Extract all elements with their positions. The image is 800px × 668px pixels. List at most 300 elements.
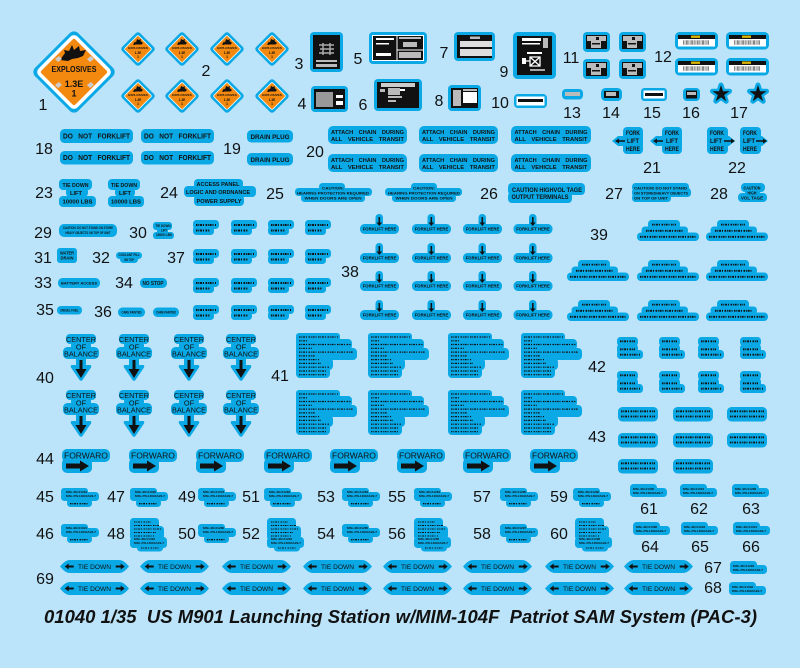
decal 40: center of balance: OF xyxy=(76,342,87,352)
decal 17: stars: 17 xyxy=(730,105,748,122)
decals 45 to 60: serial number blocks: MSL-PN-13094A29-7 xyxy=(578,494,608,498)
decal 23: tie down lift 10000 lbs: 10000 LBS xyxy=(111,200,141,206)
decal 20: attach chain during all vehicle transit xyxy=(306,126,591,172)
decal 14: small plate: 14 xyxy=(602,105,620,122)
decal 2: small explosives placards: 1 xyxy=(271,55,273,59)
decals 61 to 68: two-line serial blocks: MSL-9N-01018 xyxy=(684,525,705,529)
decals 45 to 60: serial number blocks: MSL-9N-01022 xyxy=(134,537,155,541)
decal 40: center of balance: BALANCE xyxy=(117,406,151,414)
decals 45 to 60: serial number blocks: MSL-PN-13094A29-7 xyxy=(203,494,233,498)
decal 35: diesel fuel: 35 xyxy=(36,302,54,319)
decal 40: center of balance: CENTER xyxy=(119,391,149,400)
decal 31: water drain: 31 xyxy=(34,250,52,267)
decal 12: barcode plates xyxy=(654,32,769,76)
decal 30: small tie down xyxy=(129,222,174,242)
decals 45 to 60: serial number blocks: 51 xyxy=(242,489,260,506)
decal 5: data plate: 5 xyxy=(354,51,363,68)
decal 41: dense text blocks: 41 xyxy=(271,368,289,385)
decal 40: center of balance: OF xyxy=(129,342,140,352)
decal 32: coolant fill xyxy=(92,250,142,267)
decal 40: center of balance xyxy=(36,334,259,437)
decal 43: two-line text blocks: 43 xyxy=(588,429,606,446)
decal 40: center of balance: CENTER xyxy=(66,335,96,344)
decal 29: caution small text: HEAVY OBJECTS ON TOP OF UNIT xyxy=(66,231,111,235)
decal 18: do not forklift: DO NOT FORKLIFT xyxy=(63,153,130,162)
decals 45 to 60: serial number blocks: 58 xyxy=(473,526,491,543)
decal 12: barcode plates: 12 xyxy=(654,49,672,66)
decals 45 to 60: serial number blocks: 59 xyxy=(550,489,568,506)
decal 19: drain plug xyxy=(223,130,293,166)
decal 44: forward arrows: 44 xyxy=(36,451,54,468)
decals 45 to 60: serial number blocks: MSL-PN-13094A29-7 xyxy=(66,530,96,534)
decal 30: small tie down: 10000 LBS xyxy=(156,233,172,237)
decals 61 to 68: two-line serial blocks: MSL-9N-01031 xyxy=(683,487,704,491)
decal 69: tie down arrows: TIE DOWN xyxy=(240,564,273,571)
decal 26: caution high voltage output terminals xyxy=(480,183,585,203)
decals 45 to 60: serial number blocks: 57 xyxy=(473,489,491,506)
decals 61 to 68: two-line serial blocks: 61 xyxy=(640,501,658,518)
decal 40: center of balance: BALANCE xyxy=(64,350,98,358)
decal 36: care painted: CARE PAINTED xyxy=(122,310,142,314)
decal 40: center of balance: OF xyxy=(184,342,195,352)
decal 32: coolant fill: COOLANT FILL xyxy=(118,253,140,257)
decal 69: tie down arrows: TIE DOWN xyxy=(78,586,111,593)
decal 43: two-line text blocks xyxy=(588,407,767,474)
decals 45 to 60: serial number blocks: MSL-PN-13094A29-7 xyxy=(271,541,301,545)
decal 8: data plate: 8 xyxy=(435,93,444,110)
decal 20: attach chain during all vehicle transit: ALL VEHICLE TRANSIT xyxy=(331,165,404,171)
decal 69: tie down arrows: TIE DOWN xyxy=(642,564,675,571)
decals 45 to 60: serial number blocks: 45 xyxy=(36,489,54,506)
decal 25: caution hearing protection required: HEARING PROTECTION REQUIRED xyxy=(297,190,369,195)
decal 22: fork lift here, right arrows: FORK xyxy=(710,131,725,137)
decals 45 to 60: serial number blocks: MSL-9N-01285 xyxy=(347,526,368,530)
decal 28: caution high voltage xyxy=(710,183,767,203)
decal 42: small stacked text blocks xyxy=(588,337,766,393)
decal 21: fork lift here, left arrows xyxy=(612,127,682,177)
decals 45 to 60: serial number blocks: MSL-9N-01280 xyxy=(203,526,224,530)
decals 61 to 68: two-line serial blocks: 65 xyxy=(691,539,709,556)
decal 2: small explosives placards: EXPLOSIVES xyxy=(217,93,237,97)
decals 61 to 68: two-line serial blocks: 64 xyxy=(641,539,659,556)
decals 45 to 60: serial number blocks: MSL-PN-13094A29-7 xyxy=(135,494,165,498)
decals 45 to 60: serial number blocks: MSL-9N-01021 xyxy=(66,526,87,530)
decal 2: small explosives placards: 1 xyxy=(226,55,228,59)
decal 14: small plate xyxy=(601,88,622,122)
decal 11: plates xyxy=(563,32,646,79)
decal 42: small stacked text blocks: 42 xyxy=(588,359,606,376)
decal 40: center of balance: BALANCE xyxy=(172,406,206,414)
decal 25: caution hearing protection required xyxy=(266,183,462,203)
decal 38: forklift here arrows: FORKLIFT HERE xyxy=(415,256,448,261)
decal 20: attach chain during all vehicle transit: ALL VEHICLE TRANSIT xyxy=(331,137,404,143)
decal 28: caution high voltage: 28 xyxy=(710,186,728,203)
decal 21: fork lift here, left arrows: HERE xyxy=(665,147,679,153)
decal 22: fork lift here, right arrows: LIFT xyxy=(743,139,755,145)
decal 16: small plate xyxy=(682,88,700,122)
decal 2: small explosives placards: 1.3E xyxy=(135,51,141,55)
decal 38: forklift here arrows: FORKLIFT HERE xyxy=(363,284,396,289)
decal 27: caution do not stand: CAUTION! DO NOT STAND xyxy=(634,185,687,190)
decal 44: forward arrows xyxy=(36,449,578,473)
decal 22: fork lift here, right arrows: FORK xyxy=(743,131,758,137)
decal 36: care painted xyxy=(94,304,179,321)
decal 2: small explosives placards: 1.3E xyxy=(269,51,275,55)
decal 40: center of balance: CENTER xyxy=(226,335,256,344)
decals 45 to 60: serial number blocks: MSL-9N-01283 xyxy=(347,490,368,494)
decal 40: center of balance: BALANCE xyxy=(117,350,151,358)
decal 31: water drain: DRAIN xyxy=(60,256,74,261)
decal 2: small explosives placards: 1 xyxy=(137,55,139,59)
decal 3: data plate: 3 xyxy=(295,56,304,73)
decal 38: forklift here arrows: 38 xyxy=(341,264,359,281)
decal 2: small explosives placards: 1.3E xyxy=(135,98,141,102)
decal 20: attach chain during all vehicle transit: ALL VEHICLE TRANSIT xyxy=(422,165,495,171)
decal 69: tie down arrows: TIE DOWN xyxy=(158,586,191,593)
decal 18: do not forklift xyxy=(35,129,214,164)
decal 38: forklift here arrows: FORKLIFT HERE xyxy=(415,227,448,232)
decals 45 to 60: serial number blocks: MSL-9N-01073 xyxy=(203,490,224,494)
decals 45 to 60: serial number blocks: MSL-PN-13094A29-7 xyxy=(134,541,164,545)
decal 36: care painted: CARE PAINTED xyxy=(156,310,177,314)
decals 45 to 60: serial number blocks: 46 xyxy=(36,526,54,543)
decal 30: small tie down: 30 xyxy=(129,225,147,242)
decal 2: small explosives placards: EXPLOSIVES xyxy=(128,93,148,97)
decals 45 to 60: serial number blocks: MSL-9N-01284 xyxy=(419,490,440,494)
decal 69: tie down arrows: TIE DOWN xyxy=(321,586,354,593)
decals 45 to 60: serial number blocks xyxy=(36,488,612,552)
decals 45 to 60: serial number blocks: 60 xyxy=(550,526,568,543)
decal 27: caution do not stand: ON TOP OF UNIT xyxy=(634,195,669,200)
decal 21: fork lift here, left arrows: LIFT xyxy=(666,139,678,145)
decal 23: tie down lift 10000 lbs: 10000 LBS xyxy=(62,200,93,206)
decal 28: caution high voltage: HIGH xyxy=(748,190,756,196)
decal 13: small plate: 13 xyxy=(563,105,581,122)
decal 69: tie down arrows: TIE DOWN xyxy=(642,586,675,593)
decal 40: center of balance: OF xyxy=(184,398,195,408)
decal 20: attach chain during all vehicle transit: ATTACH CHAIN DURING xyxy=(331,130,404,136)
decal 17: stars xyxy=(712,85,766,122)
decal 2: small explosives placards: 1.3E xyxy=(269,98,275,102)
decals 45 to 60: serial number blocks: 49 xyxy=(178,489,196,506)
decal 25: caution hearing protection required: WHEN DOORS ARE OPEN xyxy=(304,195,362,200)
decals 61 to 68: two-line serial blocks xyxy=(630,484,770,597)
decal 9: data plate xyxy=(500,32,556,81)
decal 23: tie down lift 10000 lbs xyxy=(35,179,144,207)
decal 69: tie down arrows: TIE DOWN xyxy=(321,564,354,571)
decals 45 to 60: serial number blocks: MSL-9N-01286 xyxy=(418,537,439,541)
decal 1: large explosives placard xyxy=(31,29,117,115)
decal 2: small explosives placards: 1.3E xyxy=(224,98,230,102)
decals 45 to 60: serial number blocks: 48 xyxy=(107,526,125,543)
decal 69: tie down arrows: TIE DOWN xyxy=(563,564,596,571)
decal 30: small tie down: LIFT xyxy=(161,228,167,232)
decal 21: fork lift here, left arrows: LIFT xyxy=(627,139,639,145)
decal 2: small explosives placards: EXPLOSIVES xyxy=(262,46,282,50)
decal 24: access panel logic and ordnance power supply: POWER SUPPLY xyxy=(196,199,242,205)
decal 38: forklift here arrows xyxy=(341,214,552,320)
decal 25: caution hearing protection required: CAUTION: xyxy=(413,185,435,190)
decal 2: small explosives placards: EXPLOSIVES xyxy=(262,93,282,97)
decal 25: caution hearing protection required: WHEN DOORS ARE OPEN xyxy=(396,195,453,200)
decal 6: data plate xyxy=(359,79,422,114)
decal 31: water drain xyxy=(34,248,77,267)
decal 15: small plate xyxy=(641,88,667,122)
decals 45 to 60: serial number blocks: MSL-PN-13094A29-7 xyxy=(419,494,449,498)
decal 29: caution small text xyxy=(34,224,117,242)
decal 9: data plate: 9 xyxy=(500,64,509,81)
decal 8: data plate xyxy=(435,85,481,111)
decals 45 to 60: serial number blocks: MSL-PN-13094A29-7 xyxy=(505,530,535,534)
decal 21: fork lift here, left arrows: FORK xyxy=(626,131,641,137)
decals 61 to 68: two-line serial blocks: MSL-9N-01032 xyxy=(732,585,753,589)
decal 35: diesel fuel xyxy=(36,302,82,319)
decals 45 to 60: serial number blocks: MSL-PN-13094A29-7 xyxy=(347,530,377,534)
decal 32: coolant fill: ON TOP xyxy=(124,258,135,262)
decal 38: forklift here arrows: FORKLIFT HERE xyxy=(466,313,499,318)
decal 44: forward arrows: FORWARO xyxy=(131,450,175,460)
decal 44: forward arrows: FORWARO xyxy=(399,450,443,460)
decal 20: attach chain during all vehicle transit: ATTACH CHAIN DURING xyxy=(331,158,404,164)
decal 24: access panel logic and ordnance power supply: LOGIC AND ORDNANCE xyxy=(186,190,250,196)
decal 21: fork lift here, left arrows: 21 xyxy=(643,160,661,177)
decals 45 to 60: serial number blocks: 55 xyxy=(388,489,406,506)
decals 61 to 68: two-line serial blocks: MSL-9N-01021 xyxy=(736,525,757,529)
decal 22: fork lift here, right arrows: HERE xyxy=(743,147,757,153)
decals 45 to 60: serial number blocks: 56 xyxy=(388,526,406,543)
decal 20: attach chain during all vehicle transit: ALL VEHICLE TRANSIT xyxy=(514,137,588,143)
decal 25: caution hearing protection required: HEARING PROTECTION REQUIRED xyxy=(388,190,460,195)
decal 38: forklift here arrows: FORKLIFT HERE xyxy=(363,256,396,261)
decal 40: center of balance: OF xyxy=(236,398,247,408)
decal 20: attach chain during all vehicle transit: ALL VEHICLE TRANSIT xyxy=(514,165,588,171)
decals 61 to 68: two-line serial blocks: 67 xyxy=(704,560,722,577)
decal 40: center of balance: OF xyxy=(129,398,140,408)
decal 37: small text blocks: 37 xyxy=(167,250,185,267)
decal 19: drain plug: DRAIN PLUG xyxy=(250,134,290,141)
decals 45 to 60: serial number blocks: MSL-PN-13094A29-7 xyxy=(505,494,535,498)
decal 22: fork lift here, right arrows xyxy=(707,127,768,177)
decal 38: forklift here arrows: FORKLIFT HERE xyxy=(466,284,499,289)
decal 32: coolant fill: 32 xyxy=(92,250,110,267)
decals 45 to 60: serial number blocks: 52 xyxy=(242,526,260,543)
decal 41: dense text blocks xyxy=(271,333,582,435)
decal 19: drain plug: 19 xyxy=(223,141,241,158)
decal 23: tie down lift 10000 lbs: LIFT xyxy=(70,191,83,197)
decal 69: tie down arrows: TIE DOWN xyxy=(401,564,434,571)
decal 38: forklift here arrows: FORKLIFT HERE xyxy=(363,227,396,232)
decals 61 to 68: two-line serial blocks: MSL-PN-13094A29-7 xyxy=(735,491,765,495)
decal 3: data plate xyxy=(295,32,343,73)
decal 25: caution hearing protection required: 25 xyxy=(266,186,284,203)
decal 38: forklift here arrows: FORKLIFT HERE xyxy=(516,227,550,232)
decal 24: access panel logic and ordnance power supply: ACCESS PANEL xyxy=(196,182,240,188)
decal 38: forklift here arrows: FORKLIFT HERE xyxy=(516,256,550,261)
decal 18: do not forklift: DO NOT FORKLIFT xyxy=(63,132,130,140)
decals 61 to 68: two-line serial blocks: MSL-PN-13094A29-7 xyxy=(683,491,713,495)
decals 45 to 60: serial number blocks: MSL-9N-01284 xyxy=(271,537,292,541)
decal 38: forklift here arrows: FORKLIFT HERE xyxy=(466,256,499,261)
decal 20: attach chain during all vehicle transit: 20 xyxy=(306,144,324,161)
decal 7: data plate xyxy=(440,32,495,62)
decals 45 to 60: serial number blocks: MSL-PN-13094A29-7 xyxy=(418,541,448,545)
decals 45 to 60: serial number blocks: MSL-9N-01019 xyxy=(66,490,87,494)
decal 2: small explosives placards: 1 xyxy=(271,102,273,106)
decal 39: tiered text blocks xyxy=(567,220,768,321)
decal 69: tie down arrows: TIE DOWN xyxy=(481,586,514,593)
decal 40: center of balance: CENTER xyxy=(226,391,256,400)
decal 40: center of balance: CENTER xyxy=(174,391,204,400)
decal 27: caution do not stand xyxy=(605,183,691,203)
decal 22: fork lift here, right arrows: HERE xyxy=(710,147,724,153)
decals 61 to 68: two-line serial blocks: MSL-9N-01293 xyxy=(733,564,754,568)
decal 2: small explosives placards: EXPLOSIVES xyxy=(172,46,192,50)
decal 69: tie down arrows: TIE DOWN xyxy=(158,564,191,571)
decal 20: attach chain during all vehicle transit: ATTACH CHAIN DURING xyxy=(422,158,495,164)
decal 26: caution high voltage output terminals: 26 xyxy=(480,186,498,203)
decals 61 to 68: two-line serial blocks: MSL-9N-01298 xyxy=(735,487,756,491)
decal 44: forward arrows: FORWARO xyxy=(532,450,576,460)
decal 5: data plate xyxy=(354,32,427,68)
decal 1: large explosives placard: EXPLOSIVES xyxy=(52,64,97,74)
decal 2: small explosives placards: EXPLOSIVES xyxy=(172,93,192,97)
decal 69: tie down arrows: TIE DOWN xyxy=(563,586,596,593)
decal 34: no stop: NO STOP xyxy=(142,281,164,287)
decal 28: caution high voltage: CAUTION xyxy=(744,186,760,190)
decal 2: small explosives placards: 1.3E xyxy=(179,51,185,55)
decal 27: caution do not stand: ON STOREDHEAVY OBJECTS xyxy=(634,190,688,195)
decals 45 to 60: serial number blocks: 47 xyxy=(107,489,125,506)
decal 22: fork lift here, right arrows: 22 xyxy=(728,160,746,177)
decal 44: forward arrows: FORWARO xyxy=(64,450,108,460)
decal 69: tie down arrows: TIE DOWN xyxy=(481,564,514,571)
decal 30: small tie down: TIE DOWN xyxy=(156,224,171,228)
decal 36: care painted: 36 xyxy=(94,304,112,321)
decal 27: caution do not stand: 27 xyxy=(605,186,623,203)
decals 61 to 68: two-line serial blocks: MSL-9N-01030 xyxy=(633,487,654,491)
decals 61 to 68: two-line serial blocks: 63 xyxy=(742,501,760,518)
decal 26: caution high voltage output terminals: OUTPUT TERMINALS xyxy=(512,195,568,201)
decal 4: data plate: 4 xyxy=(298,96,307,113)
decal 37: small text blocks xyxy=(167,220,331,320)
decal 11: plates: 11 xyxy=(563,50,579,67)
decal 6: data plate: 6 xyxy=(359,97,368,114)
decal 23: tie down lift 10000 lbs: 23 xyxy=(35,185,53,202)
decal 39: tiered text blocks: 39 xyxy=(590,227,608,244)
decal 2: small explosives placards: 1.3E xyxy=(224,51,230,55)
decal 40: center of balance: CENTER xyxy=(66,391,96,400)
decal 33: battery access: BATTERY ACCESS xyxy=(61,280,97,285)
decals 61 to 68: two-line serial blocks: 68 xyxy=(704,580,722,597)
decal 69: tie down arrows: TIE DOWN xyxy=(240,586,273,593)
decal 15: small plate: 15 xyxy=(643,105,661,122)
decals 45 to 60: serial number blocks: MSL-9N-01282 xyxy=(269,490,290,494)
decals 45 to 60: serial number blocks: MSL-9N-01295 xyxy=(505,490,526,494)
decal 44: forward arrows: FORWARO xyxy=(198,450,242,460)
decal 28: caution high voltage: VOL TAGE xyxy=(741,196,763,200)
decals 61 to 68: two-line serial blocks: MSL-PN-13094A29-7 xyxy=(633,491,663,495)
decal 26: caution high voltage output terminals: CAUTION HIGHVOL TAGE xyxy=(512,188,582,194)
decal 34: no stop: 34 xyxy=(115,275,133,292)
decal 33: battery access: 33 xyxy=(34,275,52,292)
decal 2: small explosives placards: EXPLOSIVES xyxy=(128,46,148,50)
decal 10: small plate xyxy=(491,94,547,112)
decals 45 to 60: serial number blocks: MSL-PN-13094A29-7 xyxy=(66,494,96,498)
decal 29: caution small text: CAUTION: DO NOT STAND ON STORE xyxy=(63,226,113,230)
decal 2: small explosives placards: 2 xyxy=(202,63,211,80)
decal 38: forklift here arrows: FORKLIFT HERE xyxy=(466,227,499,232)
decal 2: small explosives placards: 1 xyxy=(181,102,183,106)
decal 38: forklift here arrows: FORKLIFT HERE xyxy=(363,313,396,318)
decal 38: forklift here arrows: FORKLIFT HERE xyxy=(516,284,550,289)
decal 20: attach chain during all vehicle transit: ATTACH CHAIN DURING xyxy=(514,130,588,136)
decal 21: fork lift here, left arrows: FORK xyxy=(665,131,680,137)
decal 1: large explosives placard: 1 xyxy=(71,88,77,98)
decals 45 to 60: serial number blocks: MSL-PN-13094A29-7 xyxy=(347,494,377,498)
decals 61 to 68: two-line serial blocks: MSL-PN-13094A29-7 xyxy=(636,529,666,533)
decals 61 to 68: two-line serial blocks: MSL-PN-13094A29-7 xyxy=(732,589,762,593)
decal 31: water drain: WATER xyxy=(60,251,75,256)
decal 40: center of balance: 40 xyxy=(36,370,54,387)
decal 2: small explosives placards: 1.3E xyxy=(179,98,185,102)
decals 61 to 68: two-line serial blocks: 62 xyxy=(690,501,708,518)
decal 40: center of balance: BALANCE xyxy=(224,350,258,358)
decal 33: battery access xyxy=(34,275,100,292)
decal 40: center of balance: BALANCE xyxy=(64,406,98,414)
decal 10: small plate: 10 xyxy=(491,95,509,112)
decal 2: small explosives placards: 1 xyxy=(137,102,139,106)
decal 38: forklift here arrows: FORKLIFT HERE xyxy=(516,313,550,318)
decals 45 to 60: serial number blocks: MSL-9N-01296 xyxy=(578,490,599,494)
decal 44: forward arrows: FORWARO xyxy=(266,450,310,460)
decal 13: small plate xyxy=(562,89,583,122)
decal 2: small explosives placards: 1 xyxy=(181,55,183,59)
decal 69: tie down arrows xyxy=(36,560,693,595)
decal 38: forklift here arrows: FORKLIFT HERE xyxy=(415,284,448,289)
decal 16: small plate: 16 xyxy=(682,105,700,122)
decal 23: tie down lift 10000 lbs: LIFT xyxy=(119,191,132,197)
decal 40: center of balance: CENTER xyxy=(174,335,204,344)
decal 22: fork lift here, right arrows: LIFT xyxy=(710,139,722,145)
decal 2: small explosives placards xyxy=(120,31,290,114)
decals 45 to 60: serial number blocks: MSL-PN-13094A29-7 xyxy=(269,494,299,498)
decal 40: center of balance: BALANCE xyxy=(224,406,258,414)
decals 45 to 60: serial number blocks: 50 xyxy=(178,526,196,543)
decal 35: diesel fuel: DIESEL FUEL xyxy=(60,308,79,312)
decal 7: data plate: 7 xyxy=(440,45,449,62)
decal 24: access panel logic and ordnance power supply: 24 xyxy=(160,185,178,202)
decal 38: forklift here arrows: FORKLIFT HERE xyxy=(415,313,448,318)
decals 45 to 60: serial number blocks: MSL-9N-01298 xyxy=(579,537,600,541)
decal 2: small explosives placards: 1 xyxy=(226,102,228,106)
decal 69: tie down arrows: TIE DOWN xyxy=(78,564,111,571)
decal 40: center of balance: OF xyxy=(236,342,247,352)
decals 45 to 60: serial number blocks: 54 xyxy=(317,526,335,543)
decal 21: fork lift here, left arrows: HERE xyxy=(626,147,640,153)
decal 23: tie down lift 10000 lbs: TIE DOWN xyxy=(62,183,88,189)
decal 1: large explosives placard: 1.3E xyxy=(65,79,83,89)
decals 61 to 68: two-line serial blocks: MSL-PN-13094A29-7 xyxy=(684,529,714,533)
decal 20: attach chain during all vehicle transit: ALL VEHICLE TRANSIT xyxy=(422,137,495,143)
decal 29: caution small text: 29 xyxy=(34,225,52,242)
title: 01040 1/35 US M901 Launching Station w/MIM-104F Patriot SAM System (PAC-3) xyxy=(44,606,757,627)
decal 69: tie down arrows: TIE DOWN xyxy=(401,586,434,593)
decal 18: do not forklift: DO NOT FORKLIFT xyxy=(144,153,211,162)
decal 18: do not forklift: 18 xyxy=(35,141,53,158)
decals 61 to 68: two-line serial blocks: MSL-PN-13094A29-7 xyxy=(733,568,763,572)
decals 45 to 60: serial number blocks: MSL-9N-01020 xyxy=(135,490,156,494)
decal 40: center of balance: BALANCE xyxy=(172,350,206,358)
